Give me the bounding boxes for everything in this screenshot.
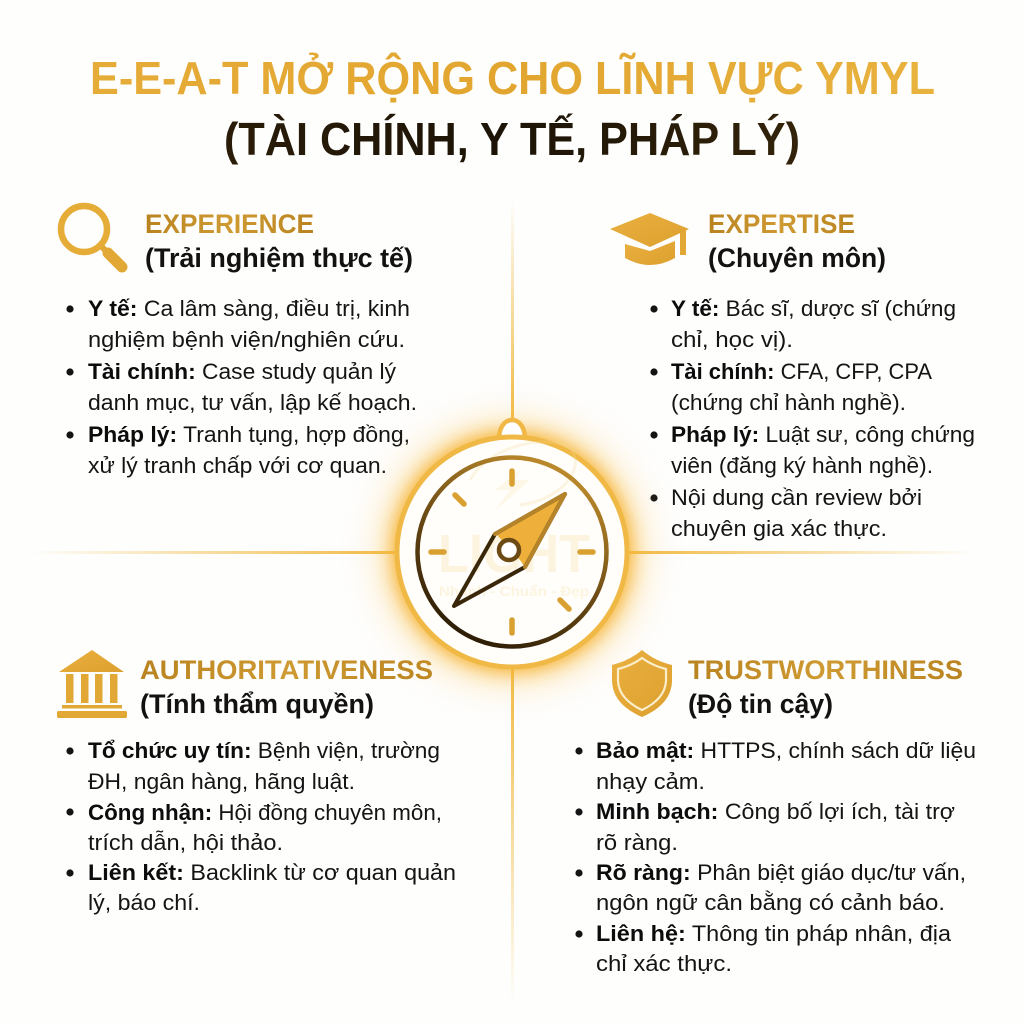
heading: trustworthiness [688, 655, 963, 719]
panel: expertise [610, 209, 975, 541]
title: (TÀI CHÍNH, Y TẾ, PHÁP LÝ) [224, 113, 800, 165]
bullet list: authoritativeness: lý, báo chí. [88, 890, 200, 915]
heading: experience [145, 209, 413, 273]
bullet list: authoritativeness: Liên kết: Backlink từ cơ quan quản [88, 860, 456, 885]
panel: authoritativeness [57, 650, 456, 915]
watermark [438, 442, 590, 599]
heading: expertise: (Chuyên môn) [708, 243, 886, 273]
bullet list: experience: Pháp lý: Tranh tụng, hợp đồng, [88, 422, 410, 447]
bullet list: expertise: viên (đăng ký hành nghề). [671, 453, 933, 478]
bullet list: expertise: chuyên gia xác thực. [671, 516, 887, 541]
bullet list: experience: Y tế: Ca lâm sàng, điều trị, kinh [88, 296, 410, 321]
bullet list: expertise: Y tế: Bác sĩ, dược sĩ (chứng [671, 296, 956, 321]
bullet list: authoritativeness: Tổ chức uy tín: Bệnh viện, trường [88, 738, 440, 763]
bullet list: expertise: Tài chính: CFA, CFP, CPA [671, 359, 933, 384]
heading: trustworthiness: (Độ tin cậy) [688, 689, 833, 719]
panel: experience [61, 206, 417, 478]
bullet list: experience: nghiệm bệnh viện/nghiên cứu. [88, 327, 405, 352]
bullet list: trustworthiness: nhạy cảm. [596, 769, 705, 794]
bullet list: trustworthiness: rõ ràng. [596, 830, 678, 855]
title [90, 52, 935, 165]
bullet list: trustworthiness: Minh bạch: Công bố lợi ích, tài trợ [596, 799, 955, 824]
compass loop [499, 420, 525, 437]
bullet list: trustworthiness: Bảo mật: HTTPS, chính sách dữ liệu [596, 738, 976, 763]
heading: trustworthiness: TRUSTWORTHINESS [688, 655, 963, 685]
bullet list: expertise: Pháp lý: Luật sư, công chứng [671, 422, 975, 447]
icon: graduation cap [610, 213, 689, 265]
compass outer ring [397, 437, 627, 667]
compass needle [454, 494, 565, 606]
cross divider lines [30, 200, 976, 1005]
watermark: LIGHT [438, 524, 590, 584]
heading: authoritativeness: (Tính thẩm quyền) [140, 689, 374, 719]
watermark: Nhanh - Chuẩn - Đẹp [439, 583, 589, 599]
bullet list: trustworthiness: Rõ ràng: Phân biệt giáo dục/tư vấn, [596, 860, 966, 885]
bullet list: trustworthiness: Liên hệ: Thông tin pháp nhân, địa [596, 921, 951, 946]
bullet list: authoritativeness: trích dẫn, hội thảo. [88, 830, 283, 855]
heading: experience: (Trải nghiệm thực tế) [145, 243, 413, 273]
compass inner ring [418, 458, 606, 646]
bullet list: experience: xử lý tranh chấp với cơ quan. [88, 453, 387, 478]
bullet list: authoritativeness [66, 738, 456, 915]
bullet list: authoritativeness: Công nhận: Hội đồng chuyên môn, [88, 800, 442, 825]
bullet list: expertise: Nội dung cần review bởi [671, 485, 922, 510]
panel: trustworthiness [575, 650, 976, 976]
icon: magnifying glass [61, 206, 122, 267]
bullet list: experience: Tài chính: Case study quản lý [88, 359, 397, 384]
bullet list: expertise: (chứng chỉ hành nghề). [671, 390, 906, 415]
heading: authoritativeness [140, 655, 433, 719]
bullet list: trustworthiness: ngôn ngữ cân bằng có cảnh báo. [596, 890, 945, 915]
heading: authoritativeness: AUTHORITATIVENESS [140, 655, 433, 685]
bullet list: trustworthiness [575, 738, 976, 976]
bullet list: expertise [650, 296, 975, 541]
heading: experience: EXPERIENCE [145, 209, 314, 239]
central compass [384, 420, 640, 680]
compass ticks [431, 471, 593, 633]
bullet list: authoritativeness: ĐH, ngân hàng, hãng luật. [88, 769, 355, 794]
bullet list: experience [66, 296, 417, 478]
bullet list: experience: danh mục, tư vấn, lập kế hoạch. [88, 390, 417, 415]
icon: shield [612, 650, 672, 717]
icon: classical building [57, 650, 127, 718]
title: E-E-A-T MỞ RỘNG CHO LĨNH VỰC YMYL [90, 52, 935, 104]
bullet list: trustworthiness: chỉ xác thực. [596, 951, 732, 976]
heading: expertise: EXPERTISE [708, 209, 855, 239]
heading: expertise [708, 209, 886, 273]
bullet list: expertise: chỉ, học vị). [671, 327, 793, 352]
